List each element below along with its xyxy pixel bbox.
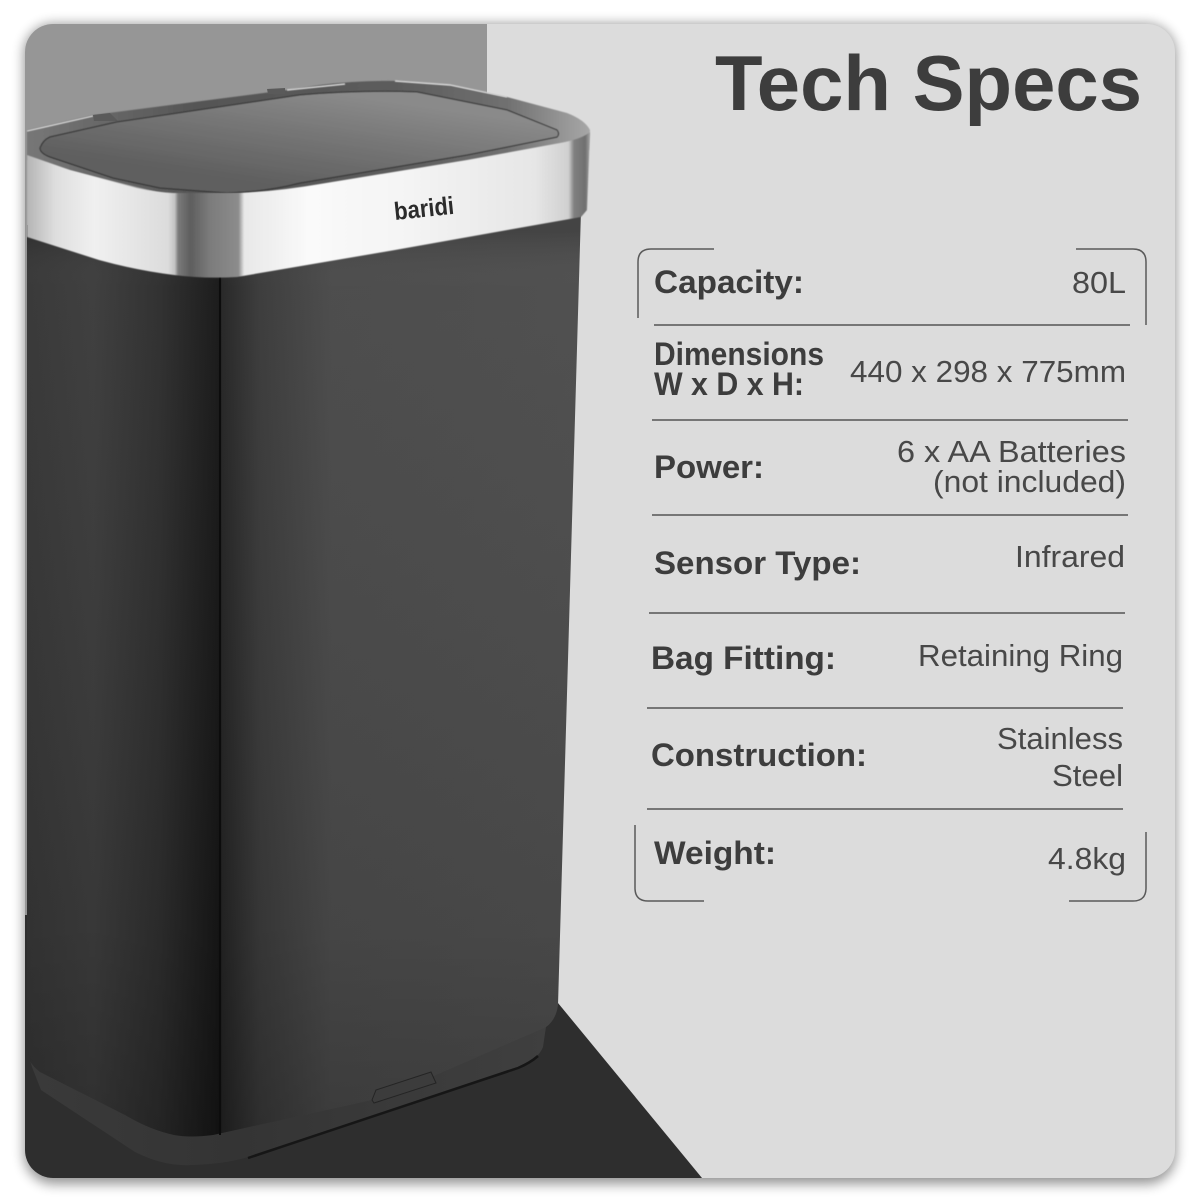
bin body xyxy=(27,210,581,1136)
row: dimensions xyxy=(654,336,1126,402)
row: construction: Steel xyxy=(1052,758,1123,793)
spec table xyxy=(635,249,1146,901)
row: power: Power: xyxy=(654,449,764,485)
title: Tech Specs xyxy=(715,39,1142,127)
row: sensor type: Sensor Type: xyxy=(654,545,861,581)
rim highlights xyxy=(27,81,507,131)
row: sensor type: Infrared xyxy=(1015,539,1125,574)
row: sensor type xyxy=(654,539,1125,581)
hinge clips xyxy=(93,88,285,121)
row: capacity: 80L xyxy=(1072,265,1126,300)
lid rim xyxy=(27,81,590,196)
row dividers xyxy=(647,325,1130,809)
row: capacity xyxy=(654,264,1126,300)
steel band xyxy=(27,132,590,278)
dark floor xyxy=(25,915,702,1178)
row: dimensions: W x D x H: xyxy=(654,366,804,402)
row: construction: Construction: xyxy=(651,737,867,773)
row: dimensions: Dimensions xyxy=(654,336,824,372)
row: construction: Stainless xyxy=(997,721,1123,756)
row: weight: Weight: xyxy=(654,835,776,871)
corner seam xyxy=(219,276,221,1135)
row: bag fitting: Retaining Ring xyxy=(918,638,1123,673)
product: baridi sensor bin xyxy=(27,81,590,1165)
grey backdrop block xyxy=(25,24,487,916)
bin base xyxy=(27,1020,547,1165)
table bracket: bottom xyxy=(635,825,1146,901)
row: power: (not included) xyxy=(933,464,1126,499)
row: bag fitting: Bag Fitting: xyxy=(651,640,836,676)
row: power: 6 x AA Batteries xyxy=(897,434,1126,469)
body shading xyxy=(27,210,581,1136)
row: dimensions: 440 x 298 x 775mm xyxy=(850,354,1126,389)
foot pedal xyxy=(372,1072,436,1103)
base contact shadow xyxy=(248,1056,538,1158)
table bracket: top xyxy=(638,249,1146,325)
row: construction xyxy=(651,721,1123,793)
row: power xyxy=(654,434,1126,499)
lid top xyxy=(40,91,558,193)
row: capacity: Capacity: xyxy=(654,264,804,300)
row: weight: 4.8kg xyxy=(1048,841,1126,876)
row: bag fitting xyxy=(651,638,1123,676)
row: weight xyxy=(654,835,1126,876)
brand logo: baridi xyxy=(393,192,455,226)
